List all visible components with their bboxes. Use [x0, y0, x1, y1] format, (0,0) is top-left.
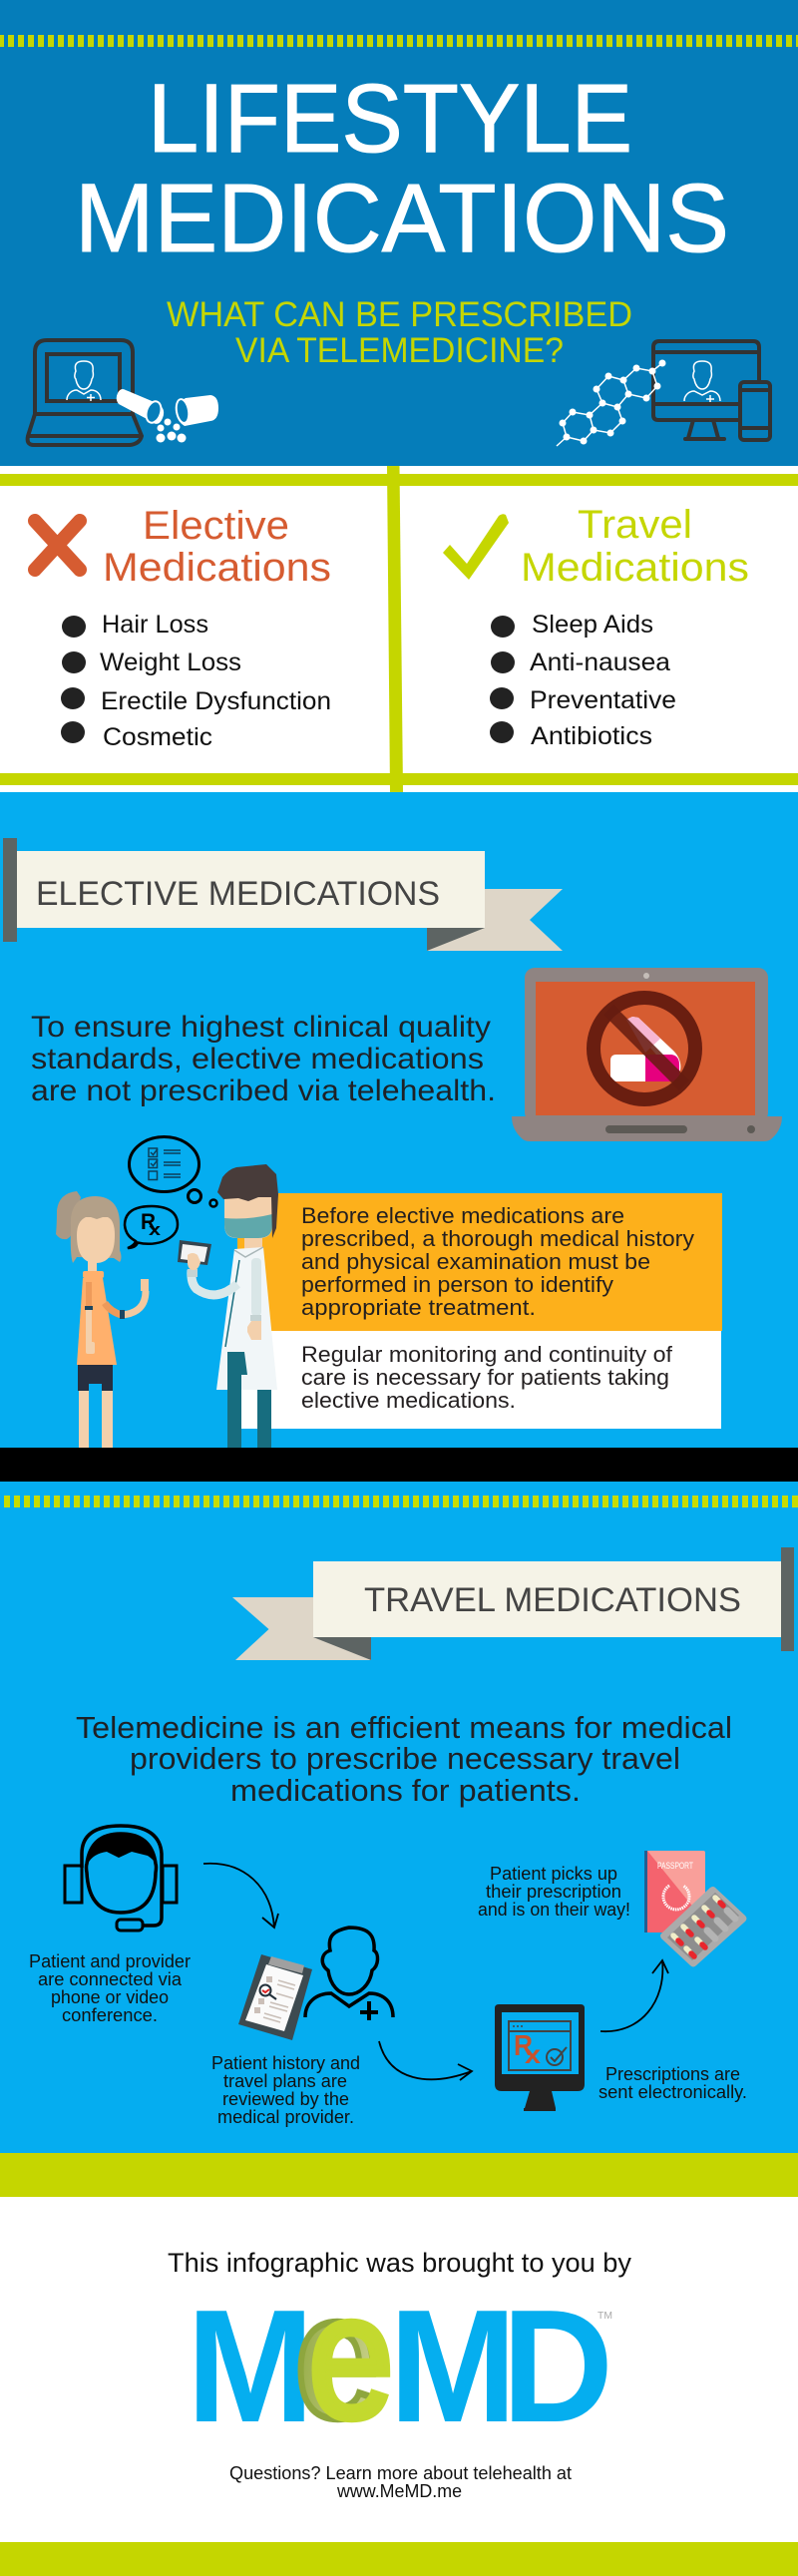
- text: questions: [229, 2463, 572, 2501]
- arrow: step 3 to 4: [600, 1960, 668, 2031]
- icon: provider outline: [305, 1928, 393, 2020]
- list: elective medications: Weight Loss: [100, 648, 241, 676]
- text: clinical quality statement: [31, 1011, 496, 1107]
- ribbon heading: elective medications: ELECTIVE MEDICATIONS: [36, 875, 440, 913]
- icon: prescription monitor: [495, 2004, 585, 2111]
- text: telemedicine statement: Telemedicine is an efficient means for medical: [76, 1710, 732, 1745]
- list: elective medications: Cosmetic: [103, 723, 212, 751]
- heading: travel medications: [521, 503, 749, 590]
- subtitle: [167, 295, 632, 370]
- icon: headset person: [65, 1826, 177, 1931]
- text: brought to you by: This infographic was brought to you by: [168, 2248, 631, 2278]
- icon: laptop with prohibited pills: [512, 968, 782, 1141]
- icon: thought bubble checklist: [130, 1137, 217, 1207]
- panel: elective medications section: [0, 792, 798, 1482]
- text: step 1: phone or video: [51, 1987, 169, 2007]
- list: elective medications: Erectile Dysfunction: [101, 687, 331, 715]
- text: telemedicine statement: providers to prescribe necessary travel: [130, 1741, 680, 1776]
- icon: rx speech bubble: R: [141, 1209, 156, 1234]
- callout: orange box: appropriate treatment.: [301, 1295, 536, 1320]
- callout: white box: [241, 1331, 721, 1429]
- icon: rx speech bubble: x: [149, 1220, 162, 1239]
- text: step 3: [598, 2064, 747, 2102]
- title: MEDICATIONS: [75, 164, 729, 272]
- list: travel medications: Antibiotics: [531, 722, 652, 750]
- list: travel medications: [490, 611, 676, 750]
- lime band: [0, 2153, 798, 2197]
- logo: MeMD: e: [294, 2257, 380, 2455]
- icon: prescription monitor: R: [514, 2030, 533, 2062]
- list: travel medications: Preventative: [530, 686, 676, 714]
- callout: orange box: and physical examination must be: [301, 1249, 650, 1274]
- icon: laptop with doctor and capsule: [28, 340, 218, 445]
- icon: clipboard: [238, 1954, 312, 2040]
- text: telemedicine statement: medications for patients.: [230, 1773, 581, 1808]
- text: step 1: conference.: [62, 2005, 158, 2025]
- logo: MeMD: D: [502, 2277, 613, 2456]
- icon: prescription monitor: x: [525, 2039, 542, 2069]
- icon: lime check mark: [443, 514, 509, 580]
- text: step 2: travel plans are: [223, 2071, 347, 2091]
- figure: patient: [56, 1191, 149, 1448]
- ribbon heading: elective medications: [3, 838, 563, 951]
- icon: monitor and phone with molecule: [557, 341, 770, 446]
- text: step 4: their prescription: [486, 1882, 621, 1902]
- heading: elective medications: Elective: [143, 504, 289, 548]
- figure: doctor: [178, 1164, 278, 1448]
- text: step 3: Prescriptions are: [605, 2064, 740, 2084]
- arrow: step 1 to 2: [203, 1864, 278, 1928]
- heading: elective medications: [103, 504, 331, 590]
- text: step 3: sent electronically.: [598, 2082, 747, 2102]
- panel: header: [0, 0, 798, 466]
- heading: travel medications: Medications: [521, 546, 749, 590]
- text: questions: Questions? Learn more about telehealth at: [229, 2463, 572, 2483]
- text: clinical quality statement: standards, elective medications: [31, 1043, 484, 1075]
- text: step 2: medical provider.: [217, 2107, 354, 2127]
- title: [75, 64, 729, 272]
- text: step 2: reviewed by the: [222, 2089, 349, 2109]
- icon: orange cross: [35, 521, 80, 570]
- text: step 2: [211, 2053, 360, 2127]
- icon: passport: [644, 1851, 705, 1932]
- text: clinical quality statement: are not prescribed via telehealth.: [31, 1074, 496, 1107]
- panel: footer: [0, 2197, 798, 2542]
- callout: white box: Regular monitoring and continuity of: [301, 1342, 673, 1367]
- bottom lime band: [0, 2542, 798, 2576]
- text: questions: www.MeMD.me: [336, 2481, 462, 2501]
- list: elective medications: [61, 611, 331, 751]
- heading: travel medications: Travel: [578, 503, 692, 547]
- icon: passport: PASSPORT: [657, 1861, 693, 1871]
- text: step 1: Patient and provider: [29, 1951, 191, 1971]
- text: telemedicine statement: [76, 1710, 732, 1808]
- text: step 4: and is on their way!: [478, 1900, 630, 1920]
- ribbon heading: travel medications: TRAVEL MEDICATIONS: [364, 1581, 741, 1619]
- callout: orange box: performed in person to identify: [301, 1272, 613, 1297]
- logo: MeMD: [187, 2257, 613, 2456]
- arrow: step 2 to 3: [379, 2041, 472, 2080]
- list: travel medications: Anti-nausea: [530, 648, 670, 676]
- text: step 4: [478, 1864, 630, 1920]
- callout: white box: elective medications.: [301, 1388, 516, 1413]
- heading: elective medications: Medications: [103, 546, 331, 590]
- logo: MeMD: M: [187, 2277, 314, 2456]
- list: travel medications: Sleep Aids: [532, 611, 653, 639]
- title: LIFESTYLE: [148, 64, 632, 173]
- logo: MeMD: e: [308, 2257, 394, 2455]
- ribbon heading: travel medications: [232, 1547, 794, 1660]
- text: clinical quality statement: To ensure highest clinical quality: [31, 1011, 491, 1044]
- text: step 2: Patient history and: [211, 2053, 360, 2073]
- text: step 1: are connected via: [38, 1969, 183, 1989]
- logo: MeMD: TM: [598, 2311, 612, 2322]
- logo: MeMD: M: [389, 2277, 517, 2456]
- callout: orange box: [237, 1193, 722, 1331]
- panel: elective vs travel comparison: [0, 466, 798, 792]
- subtitle: WHAT CAN BE PRESCRIBED: [167, 295, 632, 334]
- text: step 1: [29, 1951, 191, 2025]
- panel: travel medications section: [0, 1482, 798, 2153]
- icon: rx speech bubble: [125, 1206, 178, 1248]
- callout: orange box: prescribed, a thorough medical history: [301, 1226, 694, 1251]
- subtitle: VIA TELEMEDICINE?: [235, 331, 564, 370]
- callout: white box: care is necessary for patients taking: [301, 1365, 669, 1390]
- callout: orange box: Before elective medications are: [301, 1203, 624, 1228]
- icon: blister pack: [660, 1887, 746, 1967]
- list: elective medications: Hair Loss: [102, 611, 208, 639]
- text: step 4: Patient picks up: [490, 1864, 617, 1884]
